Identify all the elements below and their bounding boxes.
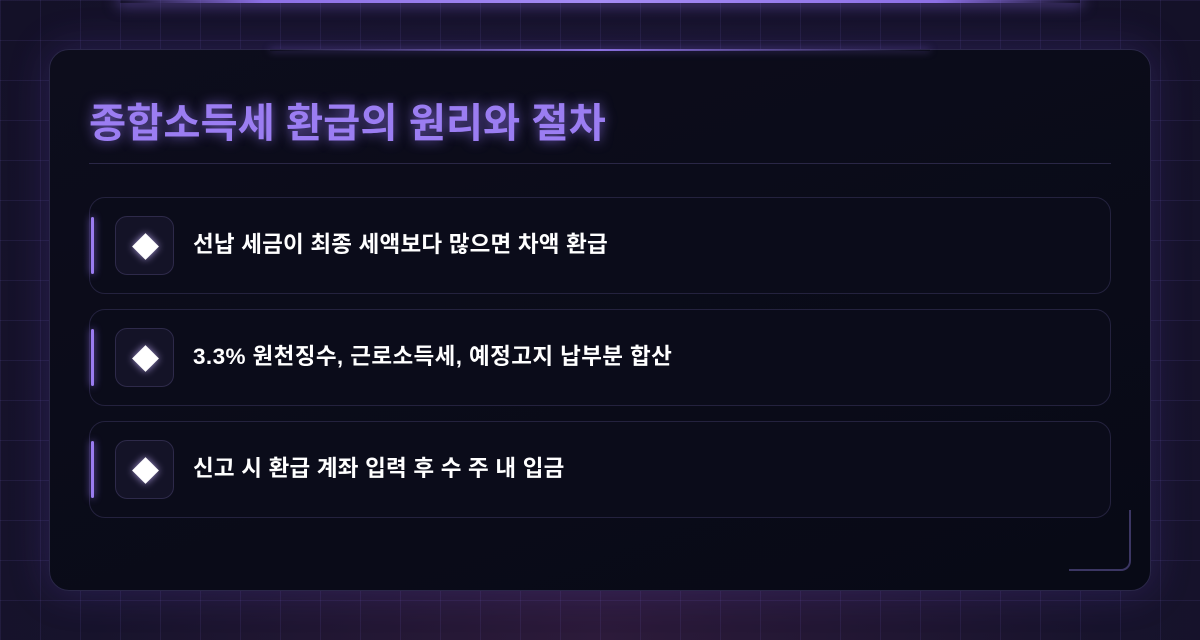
item 3 [89, 421, 1111, 518]
icon: diamond [115, 328, 174, 387]
text 1: 선납 세금이 최종 세액보다 많으면 차액 환급 [193, 232, 608, 257]
panel: main card [49, 49, 1151, 591]
text 3: 신고 시 환급 계좌 입력 후 수 주 내 입금 [193, 456, 565, 481]
icon: diamond [115, 216, 174, 275]
title: 종합소득세 환급의 원리와 절차 [89, 100, 606, 146]
text 2: 3.3% 원천징수, 근로소득세, 예정고지 납부분 합산 [193, 344, 672, 369]
item 1 [89, 197, 1111, 294]
item 2 [89, 309, 1111, 406]
icon: diamond [115, 440, 174, 499]
